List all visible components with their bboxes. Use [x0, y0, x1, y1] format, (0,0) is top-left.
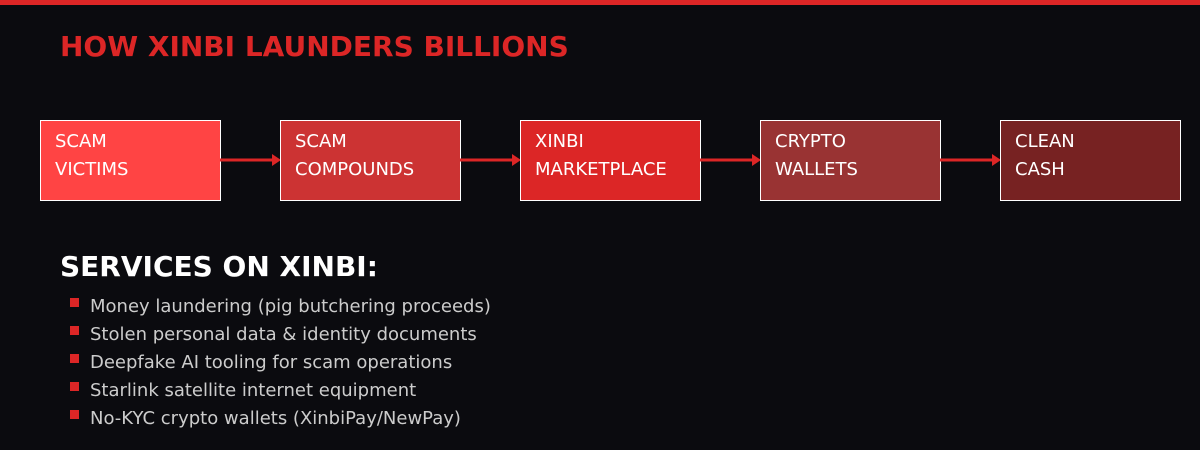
box: scam compounds: SCAM — [295, 131, 347, 152]
box: clean cash: CLEAN — [1015, 131, 1075, 152]
box: clean cash: CASH — [1015, 159, 1065, 180]
box: xinbi marketplace: XINBI — [535, 131, 584, 152]
box: crypto wallets: WALLETS — [775, 159, 858, 180]
box: clean cash — [1000, 120, 1180, 200]
box: crypto wallets — [760, 120, 940, 200]
box: crypto wallets: CRYPTO — [775, 131, 846, 152]
services list — [70, 296, 491, 429]
item 5: No-KYC crypto wallets (XinbiPay/NewPay) — [90, 408, 461, 429]
item 3: Deepfake AI tooling for scam operations — [90, 352, 452, 373]
flow diagram — [40, 120, 1180, 200]
item 2: Stolen personal data & identity documents — [90, 324, 477, 345]
box: xinbi marketplace — [520, 120, 700, 200]
arrow 4 — [940, 154, 1001, 166]
box: scam victims: SCAM — [55, 131, 107, 152]
box: scam compounds — [280, 120, 460, 200]
item 4: Starlink satellite internet equipment — [90, 380, 416, 401]
services heading: SERVICES ON XINBI: — [60, 250, 378, 283]
box: xinbi marketplace: MARKETPLACE — [535, 159, 667, 180]
box: scam victims: VICTIMS — [55, 159, 128, 180]
arrow 2 — [460, 154, 521, 166]
item 1: Money laundering (pig butchering proceeds) — [90, 296, 491, 317]
title: HOW XINBI LAUNDERS BILLIONS — [60, 30, 569, 63]
arrow 3 — [700, 154, 761, 166]
arrow 1 — [220, 154, 281, 166]
box: scam victims — [40, 120, 220, 200]
box: scam compounds: COMPOUNDS — [295, 159, 414, 180]
